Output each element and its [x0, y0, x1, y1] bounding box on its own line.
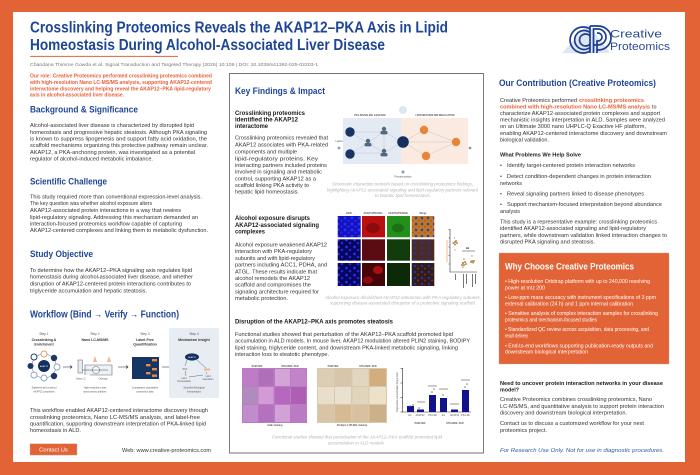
disclaimer: For Research Use Only. Not for use in diagnostic procedures. [500, 448, 664, 454]
finding 3 heading: Disruption of the AKAP12–PKA axis promotes steatosis [235, 318, 393, 325]
figure: immunofluorescence grid: AKAP12/PKARIIα [388, 212, 408, 215]
text: contribution: crosslinking proteomics [579, 98, 644, 104]
text: background: regulator of alcohol-induced metabolic imbalance. [30, 157, 153, 163]
figure: interaction network: Phosphorylation [394, 175, 412, 178]
our role callout: Our role: Creative Proteomics performed crosslinking proteomics combined [30, 74, 212, 80]
finding 1 heading [235, 110, 305, 130]
workflow diagram [28, 328, 219, 398]
finding 2 text: subunits and with lipid-regulatory [235, 256, 315, 262]
finding 1 heading: Crosslinking proteomics [235, 110, 305, 117]
our role callout: axis in alcohol-associated liver disease. [30, 93, 124, 99]
citation: Chandana Thimme Gowda et al. Signal Transduction and Targeted Therapy (2025) 10:109 | DOI: 10.1038/s41392-025-02203-1 [30, 62, 319, 67]
heading: scientific challenge: Scientific Challenge [30, 177, 107, 187]
call to action text: Contact us to discuss a customized workflow for your next [500, 421, 645, 427]
our role callout [29, 74, 212, 99]
panel bullets: power at m/z 200 [505, 286, 545, 292]
step 4 mechanism insight: Mechanism Insight [178, 338, 211, 342]
finding 2 text [235, 242, 327, 302]
step 3 label-free quantification: Label-Free [136, 338, 154, 342]
logo: Creative Proteomics [562, 24, 671, 53]
finding 1 text: hepatic lipid homeostasis. [235, 190, 299, 196]
title [30, 19, 448, 56]
text: representative example: disrupted PKA signaling and steatosis. [500, 240, 595, 246]
bullet list: problems: Reveal signaling partners linked to disease phenotypes [507, 192, 644, 198]
step 4 mechanism insight: homeostasis [177, 380, 192, 383]
step 3 label-free quantification: Comparative quantitative [132, 387, 159, 390]
our role callout: with high-resolution Nano LC-MS/MS analysis, supporting AKAP12-centered [29, 80, 212, 86]
figure: interaction network [335, 106, 471, 178]
panel bullets: proteomics and mechanism-focused studies [505, 318, 597, 324]
finding 1 text: lipid-regulatory proteins. Key [235, 156, 318, 162]
finding 1 heading: identified the AKAP12 [235, 116, 298, 123]
finding 1 text: involved in signaling and metabolic [235, 170, 322, 176]
text: contribution: enabling AKAP12-centered interactome discovery and downstream [500, 131, 668, 137]
title: Crosslinking Proteomics Reveals the AKAP12–PKA Axis in Lipid [30, 19, 448, 36]
panel bullets: • Sensitive analysis of complex interaction samples for crosslinking [505, 311, 658, 317]
step 4 mechanism insight: Lipid [205, 375, 211, 378]
figure: H&E histology: ETHANOL-FED [281, 365, 299, 368]
chart: dot plot [447, 229, 477, 288]
text: challenge: AKAP12-centered complexes and linking them to metabolic dysfunction. [30, 228, 208, 234]
our role callout: interactome discovery and helping reveal the AKAP12–PKA lipid-regulatory [30, 86, 211, 92]
text: objective [30, 268, 193, 295]
step 2 nano lc-ms/ms [76, 332, 112, 394]
finding 2 heading: AKAP12-associated signaling [235, 222, 319, 229]
finding 3 text: lipid staining, triglyceride content, and downstream PKA-linked metabolic signaling, linking [235, 346, 458, 352]
caption: immunofluorescence: supporting disease-associated disruption of a protective signaling scaffold. [330, 301, 476, 307]
finding 2 heading [235, 215, 319, 236]
panel heading: Why Choose Creative Proteomics [505, 261, 634, 271]
caption: network: highlighting AKAP12-associated signaling and lipid-regulatory partners relevant [327, 187, 479, 193]
caption: immunofluorescence [324, 295, 481, 307]
figure: immunofluorescence grid: Merge [419, 212, 427, 215]
text: representative example: This study is a representative example: crosslinking proteomics [500, 220, 657, 226]
panel: why choose creative proteomics [499, 253, 669, 364]
figure: immunofluorescence grid [338, 212, 434, 286]
text: workflow summary: This workflow enabled AKAP12-centered interactome discovery through [30, 408, 208, 414]
text: objective: homeostasis during alcohol-associated liver disease, and whether [30, 275, 193, 281]
step 4 mechanism insight: Step 4 [189, 332, 199, 336]
caption: steatosis figure [272, 435, 442, 446]
finding 3 text: Functional studies showed that perturbation of the AKAP12–PKA scaffold promoted lipid [235, 332, 453, 338]
text: contribution: combined with high-resolution Nano LC-MS/MS analysis [500, 105, 650, 111]
panel bullets: • Standardized QC review across acquisition, data processing, and [505, 327, 649, 333]
step 4 mechanism insight: deposition [203, 378, 214, 381]
caption: network: to hepatic lipid homeostasis. [375, 193, 431, 199]
step 1 crosslinking and enrichment: Stabilized and enriched [32, 387, 57, 390]
bullet list: problems: Detect condition-dependent changes in protein interaction [507, 174, 651, 180]
text: contribution: characterize AKAP12-associated protein complexes and support [500, 111, 661, 117]
caption: steatosis figure: Functional studies showed that perturbation of the AKAP12–PKA scaffold promoted lipid [272, 435, 442, 441]
call to action text: discovery and downstream biological interpretation. [500, 411, 627, 417]
bullet list: problems: • [500, 174, 502, 180]
step 4 mechanism insight: Lipid [181, 377, 187, 380]
text: challenge [30, 195, 208, 234]
chart: triglyceride bar chart [396, 368, 471, 425]
text: representative example: identified AKAP12-associated signaling and lipid-regulatory [500, 226, 646, 232]
chart: triglyceride bar chart: EV [442, 414, 445, 417]
panel bullets: external calibration (24 h) and 1 ppm internal calibration [505, 302, 633, 308]
step 3 label-free quantification: Step 3 [140, 332, 150, 336]
text: contribution: Creative Proteomics performed [500, 98, 577, 104]
bullet list: problems: • [500, 163, 502, 169]
figure: H&E histology: H&E staining [268, 424, 283, 427]
chart: triglyceride bar chart: AKAP12 [415, 414, 425, 417]
bullet list: problems: Support mechanism-focused interpretation beyond abundance [507, 202, 662, 208]
text: background: AKAP12, a PKA-anchoring protein, was investigated as a potential [30, 150, 195, 156]
heading: our contribution: Our Contribution (Creative Proteomics) [499, 78, 656, 88]
step 1 crosslinking and enrichment: AKAP12 complexes [33, 391, 55, 394]
step 1 crosslinking and enrichment: AKAP12 [40, 365, 49, 368]
caption: network [327, 182, 479, 199]
figure: PLIN2 staining: PAM-FED [328, 365, 339, 368]
step 2 nano lc-ms/ms: High-resolution mass [84, 387, 107, 390]
step 3 label-free quantification: proteomics data [136, 391, 154, 394]
finding 2 text: scaffold and compromises the [235, 283, 311, 289]
button: contact us: Contact Us [39, 447, 68, 453]
text: challenge: The key question was whether alcohol exposure alters [30, 201, 152, 207]
heading: background and significance: Background & Significance [30, 105, 138, 115]
step 2 nano lc-ms/ms: Orbitrap [99, 378, 108, 381]
finding 2 text: signaling architecture required for [235, 289, 319, 295]
figure: interaction network: Ligand [335, 140, 343, 143]
figure: H&E histology: PAM-FED [252, 365, 263, 368]
chart: triglyceride bar chart: PKA-RII [461, 414, 470, 417]
arrow step 1 to 2 [63, 366, 72, 368]
step 2 nano lc-ms/ms: Nano LC [76, 378, 86, 381]
text: background: scaffold mechanisms organizing this protective pathway remain unclear. [30, 143, 208, 149]
figure: H&E histology [242, 365, 307, 427]
step 2 nano lc-ms/ms: Step 2 [90, 332, 100, 336]
text: challenge: interaction-focused proteomics workflow capable of capturing [30, 222, 182, 228]
text: background: is known to suppress lipogenesis and support fatty acid oxidation, the [30, 137, 207, 143]
text: background: Alcohol-associated liver disease is characterized by disrupted lipid [30, 123, 194, 129]
heading: workflow: Workflow (Bind → Verify → Function) [30, 310, 179, 321]
finding 1 heading: interactome [235, 123, 268, 130]
step 4 mechanism insight [169, 328, 219, 398]
step 2 nano lc-ms/ms: Nano LC-MS/MS [81, 338, 109, 342]
heading: key findings: Key Findings & Impact [235, 86, 326, 97]
chart: triglyceride bar chart: PKA-RII [428, 414, 437, 417]
call to action heading [500, 381, 663, 394]
call to action text: LC-MS/MS, and quantitative analysis to support protein interaction [500, 404, 664, 410]
panel bullets: result delivery [505, 334, 528, 340]
text: challenge: AKAP12-associated protein interactions in a way that rewires [30, 208, 181, 214]
text: contribution: biological validation. [500, 138, 549, 144]
finding 3 text [235, 332, 470, 358]
text: objective: To determine how the AKAP12–PKA signaling axis regulates lipid [30, 268, 192, 274]
text: background: homeostasis and progressive hepatic steatosis. Although PKA signaling [30, 130, 207, 136]
figure: interaction network: LIPID METABOLISM REGULATION [416, 114, 455, 117]
finding 3 text: interaction loss to steatotic phenotype. [235, 352, 329, 358]
call to action text: Creative Proteomics combines crosslinking proteomics, Nano [500, 397, 652, 403]
heading: study objective: Study Objective [30, 249, 93, 259]
finding 2 text: metabolic protection. [235, 296, 288, 302]
step 4 mechanism insight: Simplified Biological [183, 387, 205, 390]
finding 1 text: AKAP12 associates with PKA-related [235, 143, 328, 149]
chart: triglyceride bar chart: ETHANOL-FED [446, 422, 464, 425]
step 2 nano lc-ms/ms: spectrometry platform [83, 391, 107, 394]
text: contribution: to [652, 105, 657, 111]
caption: immunofluorescence: Alcohol exposure diminished AKAP12 interaction with PKA regulatory subunits, [324, 295, 481, 301]
text: contribution: on an Ultimate 3000 nano UHPLC-Q Exactive HF platform, [500, 124, 646, 130]
panel: key findings and impact [230, 74, 484, 453]
finding 2 text: alcohol remodels the AKAP12 [235, 276, 310, 282]
finding 3 text: accumulation in ALD models. In mouse liver, AKAP12 modulation altered PLIN2 staining, BODIPY [235, 339, 470, 345]
step 1 crosslinking and enrichment [28, 332, 60, 394]
finding 1 text: interacting partners included proteins [235, 163, 327, 169]
finding 1 text: components and multiple [235, 150, 297, 156]
bullet list: problems: networks [500, 181, 522, 187]
text: contribution [500, 98, 668, 144]
text: workflow summary [30, 408, 208, 434]
chart: triglyceride bar chart: AKAP12 [450, 414, 460, 417]
button: contact us [30, 444, 77, 455]
text: objective: triglyceride accumulation and hepatic steatosis. [30, 289, 147, 295]
bullet list: problems [500, 163, 662, 215]
text: challenge: lipid-regulatory signaling. Addressing this mechanism demanded an [30, 215, 198, 221]
finding 1 text: scaffold linking PKA activity to [235, 183, 309, 189]
bullet list: problems: • [500, 192, 502, 198]
step 1 crosslinking and enrichment: Enrichment [34, 343, 54, 347]
finding 2 heading: complexes [235, 229, 265, 236]
chart: triglyceride bar chart: Triglyceride concentration (mg/g liver) [396, 372, 399, 412]
text: workflow summary: quantification, supporting downstream interpretation of PKA-linked lipid [30, 422, 206, 428]
text: representative example [500, 220, 667, 246]
figure: PLIN2 staining: ETHANOL-FED [359, 365, 377, 368]
call to action heading: Need to uncover protein interaction networks in your disease [500, 381, 663, 387]
figure: immunofluorescence grid: DAPI [346, 212, 352, 215]
arrow step 3 to 4 [162, 366, 172, 368]
text: contribution: mechanistic insights interpretation in ALD. Samples were analyzed [500, 118, 665, 124]
finding 1 text: control, supporting AKAP12 as a [235, 176, 317, 182]
caption: steatosis figure: accumulation in ALD models. [328, 440, 385, 446]
call to action text: proteomics project. [500, 428, 547, 434]
finding 2 heading: Alcohol exposure disrupts [235, 215, 310, 222]
logo: Creative Proteomics: Creative [610, 28, 662, 40]
text: background [30, 123, 208, 163]
website: Web: www.creative-proteomics.com [122, 448, 212, 454]
step 4 mechanism insight: AKAP12 [188, 356, 197, 359]
arrow step 2 to 3 [118, 366, 128, 368]
finding 1 text: Crosslinking proteomics revealed that [235, 136, 328, 142]
bullet list: problems: Identify target-centered protein interaction networks [507, 163, 635, 169]
panel bullets: • High-resolution Orbitrap platform with up to 240,000 resolving [505, 279, 650, 285]
figure: PLIN2 staining [317, 365, 387, 427]
chart: triglyceride bar chart: PAM-FED [415, 422, 426, 425]
panel bullets: downstream biological interpretation [505, 350, 588, 356]
figure: immunofluorescence grid: AKAP12/PKARIα [363, 212, 383, 215]
text: challenge: This study required more than conventional expression-level analysis. [30, 195, 202, 201]
step 1 crosslinking and enrichment: Crosslinking & [32, 338, 57, 342]
subheading: problems: What Problems We Help Solve [500, 153, 581, 159]
step 4 mechanism insight: PKA [183, 368, 188, 371]
text: workflow summary: crosslinking proteomics, Nano LC-MS/MS analysis, and label-free [30, 415, 200, 421]
call to action text [500, 397, 664, 434]
step 1 crosslinking and enrichment: Step 1 [39, 332, 49, 336]
bullet list: problems: analysis [500, 209, 520, 215]
figure: PLIN2 staining: Perilipin 2 (PLIN2) staining [337, 424, 368, 427]
text: workflow summary: homeostasis in ALD. [30, 428, 81, 434]
finding 1 text [235, 136, 328, 196]
panel bullets: • Low-ppm mass accuracy with instrument specifications of 3 ppm [505, 295, 656, 301]
figure: interaction network: PKA SIGNALING CASCADE [354, 114, 386, 117]
chart: triglyceride bar chart: EV [408, 414, 412, 417]
finding 2 text: ATGL. These results indicate that [235, 269, 317, 275]
text: representative example: partners, while downstream validation linked interaction changes to [500, 233, 667, 239]
step 3 label-free quantification: Quantification [133, 343, 157, 347]
finding 2 text: interaction with PKA-regulatory [235, 249, 312, 255]
step 4 mechanism insight: Interpretation [187, 391, 202, 394]
call to action heading: model? [500, 388, 520, 394]
logo: Creative Proteomics: Proteomics [610, 41, 671, 53]
panel bullets: • End-to-end workflows supporting publication-ready outputs and [505, 344, 653, 350]
bullet list: problems: • [500, 202, 502, 208]
title: Homeostasis During Alcohol-Associated Liver Disease [30, 37, 385, 54]
caption: network: Schematic interaction network based on crosslinking proteomics findings, [332, 182, 473, 188]
panel bullets [505, 279, 658, 356]
step 3 label-free quantification [132, 332, 159, 394]
finding 2 text: Alcohol exposure weakened AKAP12 [235, 242, 327, 248]
text: objective: disruption of AKAP12-centered protein interactions contributes to [30, 282, 191, 288]
finding 2 text: partners including ACC1, PDHA, and [235, 263, 327, 269]
